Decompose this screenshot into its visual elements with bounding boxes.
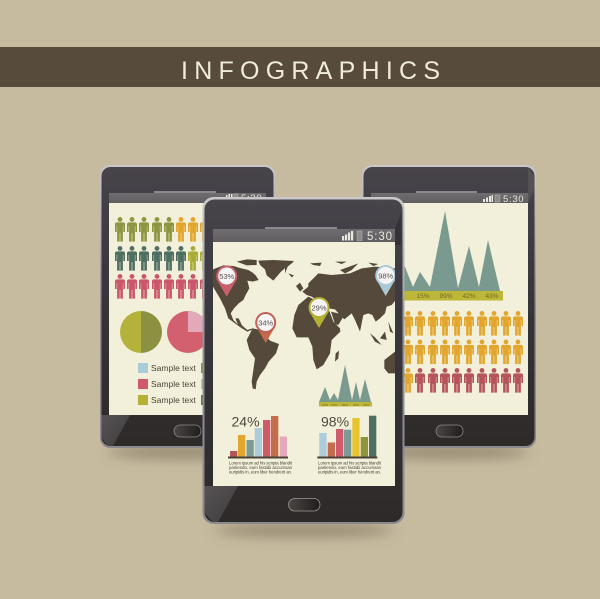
screen [109,203,266,415]
pin: 53%: 53% [219,272,235,281]
screen [213,242,395,486]
percent band: % [397,293,403,300]
people row 2 [115,246,210,271]
caption left: euripidis in, eum liber hendrerit an. [229,470,292,474]
pie chart 2 [167,311,202,353]
caption right: partiendo, eum fastidii accumsan [318,465,382,470]
status bar: 5:30 [503,194,524,205]
legend: Sample text [151,363,197,373]
title band [0,47,600,87]
mini area chart: 20% [322,403,328,407]
phone: right [362,165,536,448]
phone: center [202,197,404,524]
mini area chart: 42% [353,403,359,407]
reflection top-right [395,213,401,245]
icon: battery [357,231,362,240]
phone shadows [107,445,529,537]
mini area chart: 99% [342,403,348,407]
people row red [391,368,523,393]
pin: 29% [308,297,330,328]
caption right: Lorem ipsum ad his scripta blandit [318,460,382,466]
legend: Sample text [151,395,197,405]
pin: 34%: 34% [258,318,274,328]
reflection [102,415,130,446]
title: INFOGRAPHICS [181,57,440,85]
mini area chart: 43% [363,403,369,407]
pie chart 1 [120,311,162,353]
world map [213,259,398,389]
pin: 98% [375,265,396,296]
people row 3 [115,274,210,299]
home button [174,425,201,437]
pin: 53% [216,266,237,297]
caption right [318,460,382,474]
pin: 34% [255,312,276,343]
status bar: 5:30 [241,193,262,204]
speaker [154,191,216,193]
legend [138,363,204,405]
bar chart: 98%: 98% [321,414,349,430]
percent band: 43% [485,293,499,300]
people row 1 [115,217,210,242]
screen [371,203,528,415]
caption left: partiendo, eum fastidii accumsan [229,465,293,470]
area chart [404,211,500,291]
reflection bottom-left [204,486,238,522]
home button [288,498,320,511]
reflection [528,168,534,203]
caption right: euripidis in, eum liber hendrerit an. [318,470,381,474]
caption left [229,460,293,474]
caption left: Lorem ipsum ad his scripta blandit [229,460,293,466]
percent band: 42% [462,293,476,300]
bar chart: 98% [317,414,377,458]
pin: 98%: 98% [378,272,394,280]
pin: 29%: 29% [311,304,327,312]
people row amber 1 [391,311,523,336]
speaker [416,191,477,193]
percent band: 99% [439,293,453,300]
home button [436,425,463,437]
status bar [213,229,395,243]
people row amber 2 [391,340,523,364]
percent band [404,291,503,300]
clock: 5:30 [367,231,393,243]
speaker [265,227,337,230]
bar chart: 24%: 24% [232,414,260,430]
mini area chart [319,365,372,407]
bar chart: 24% [228,414,288,458]
icon: signal [342,231,353,240]
phone: left [100,165,275,448]
legend: Sample text [151,379,197,389]
mini area chart: 15% [331,403,337,407]
percent band: 15% [416,293,430,300]
status bar [109,193,266,204]
status bar [371,193,528,205]
